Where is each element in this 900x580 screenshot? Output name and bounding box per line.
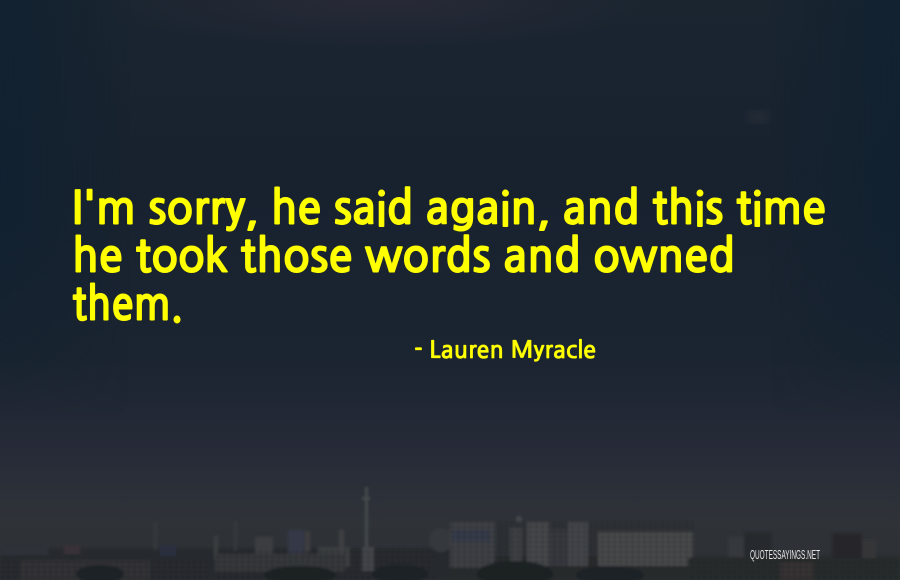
quote poster: QUOTESSAYINGS.NET: [750, 547, 820, 562]
quote line 3: them.: [72, 281, 183, 327]
skyline: blurred city silhouette: [0, 487, 900, 580]
left skyline: low buildings and towers: [0, 487, 453, 580]
right skyline: apartment blocks: [450, 516, 900, 580]
quote line 2: he took those words and owned: [72, 233, 735, 279]
quote text: [72, 185, 826, 327]
quote line 1: I'm sorry, he said again, and this time: [72, 185, 826, 231]
author attribution: - Lauren Myracle: [414, 338, 596, 362]
